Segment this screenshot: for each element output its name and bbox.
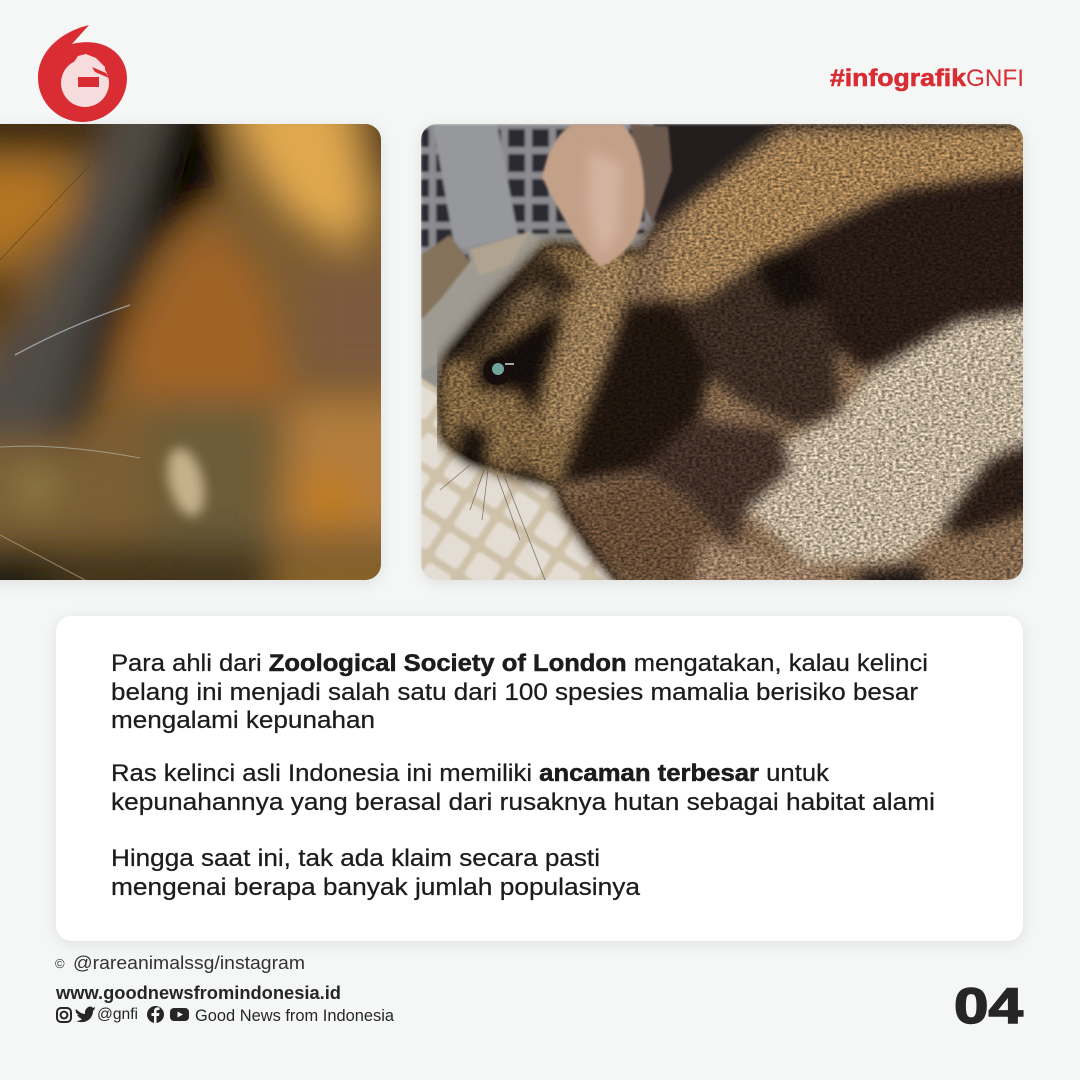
- rabbit whiskers: [440, 465, 545, 580]
- photo: blurred rabbit close-up: [0, 124, 384, 586]
- photo: striped rabbit in a crate: [421, 124, 1060, 610]
- icon: facebook: [147, 1006, 164, 1023]
- website url: www.goodnewsfromindonesia.id: [55, 983, 341, 1003]
- paragraph 3: mengenai berapa banyak jumlah populasinya: [111, 874, 641, 901]
- social media row: [57, 1006, 395, 1025]
- rabbit head: [437, 243, 640, 487]
- page number: 04: [954, 978, 1023, 1034]
- crate background and floor: [421, 124, 1023, 585]
- logo: GNFI red six emblem: [38, 25, 127, 122]
- icon: youtube: [170, 1008, 189, 1021]
- social handle: @gnfi: [97, 1006, 138, 1023]
- paragraph 3: [111, 845, 641, 901]
- photo credit: ©: [55, 956, 65, 971]
- paragraph 3: Hingga saat ini, tak ada klaim secara pasti: [111, 845, 600, 872]
- paragraph 1: [111, 650, 928, 734]
- icon: instagram: [57, 1008, 71, 1022]
- icon: twitter: [76, 1007, 95, 1022]
- paragraph 2: Ras kelinci asli Indonesia ini memiliki ancaman terbesar untuk: [111, 760, 830, 787]
- paragraph 1: belang ini menjadi salah satu dari 100 spesies mamalia berisiko besar: [111, 679, 918, 706]
- text panel: [56, 616, 1023, 941]
- hashtag: #infografikGNFI: #infografik GNFI: [830, 65, 1024, 92]
- paragraph 2: [111, 760, 935, 816]
- paragraph 1: Para ahli dari Zoological Society of London mengatakan, kalau kelinci: [111, 650, 928, 677]
- paragraph 2: kepunahannya yang berasal dari rusaknya hutan sebagai habitat alami: [111, 789, 935, 816]
- rabbit eye: [483, 357, 514, 385]
- rabbit fur: [437, 124, 1026, 586]
- photo credit: @rareanimalssg/instagram: [73, 953, 305, 973]
- paragraph 1: mengalami kepunahan: [111, 707, 375, 734]
- social page name: Good News from Indonesia: [195, 1006, 395, 1025]
- rabbit ears: [542, 124, 672, 267]
